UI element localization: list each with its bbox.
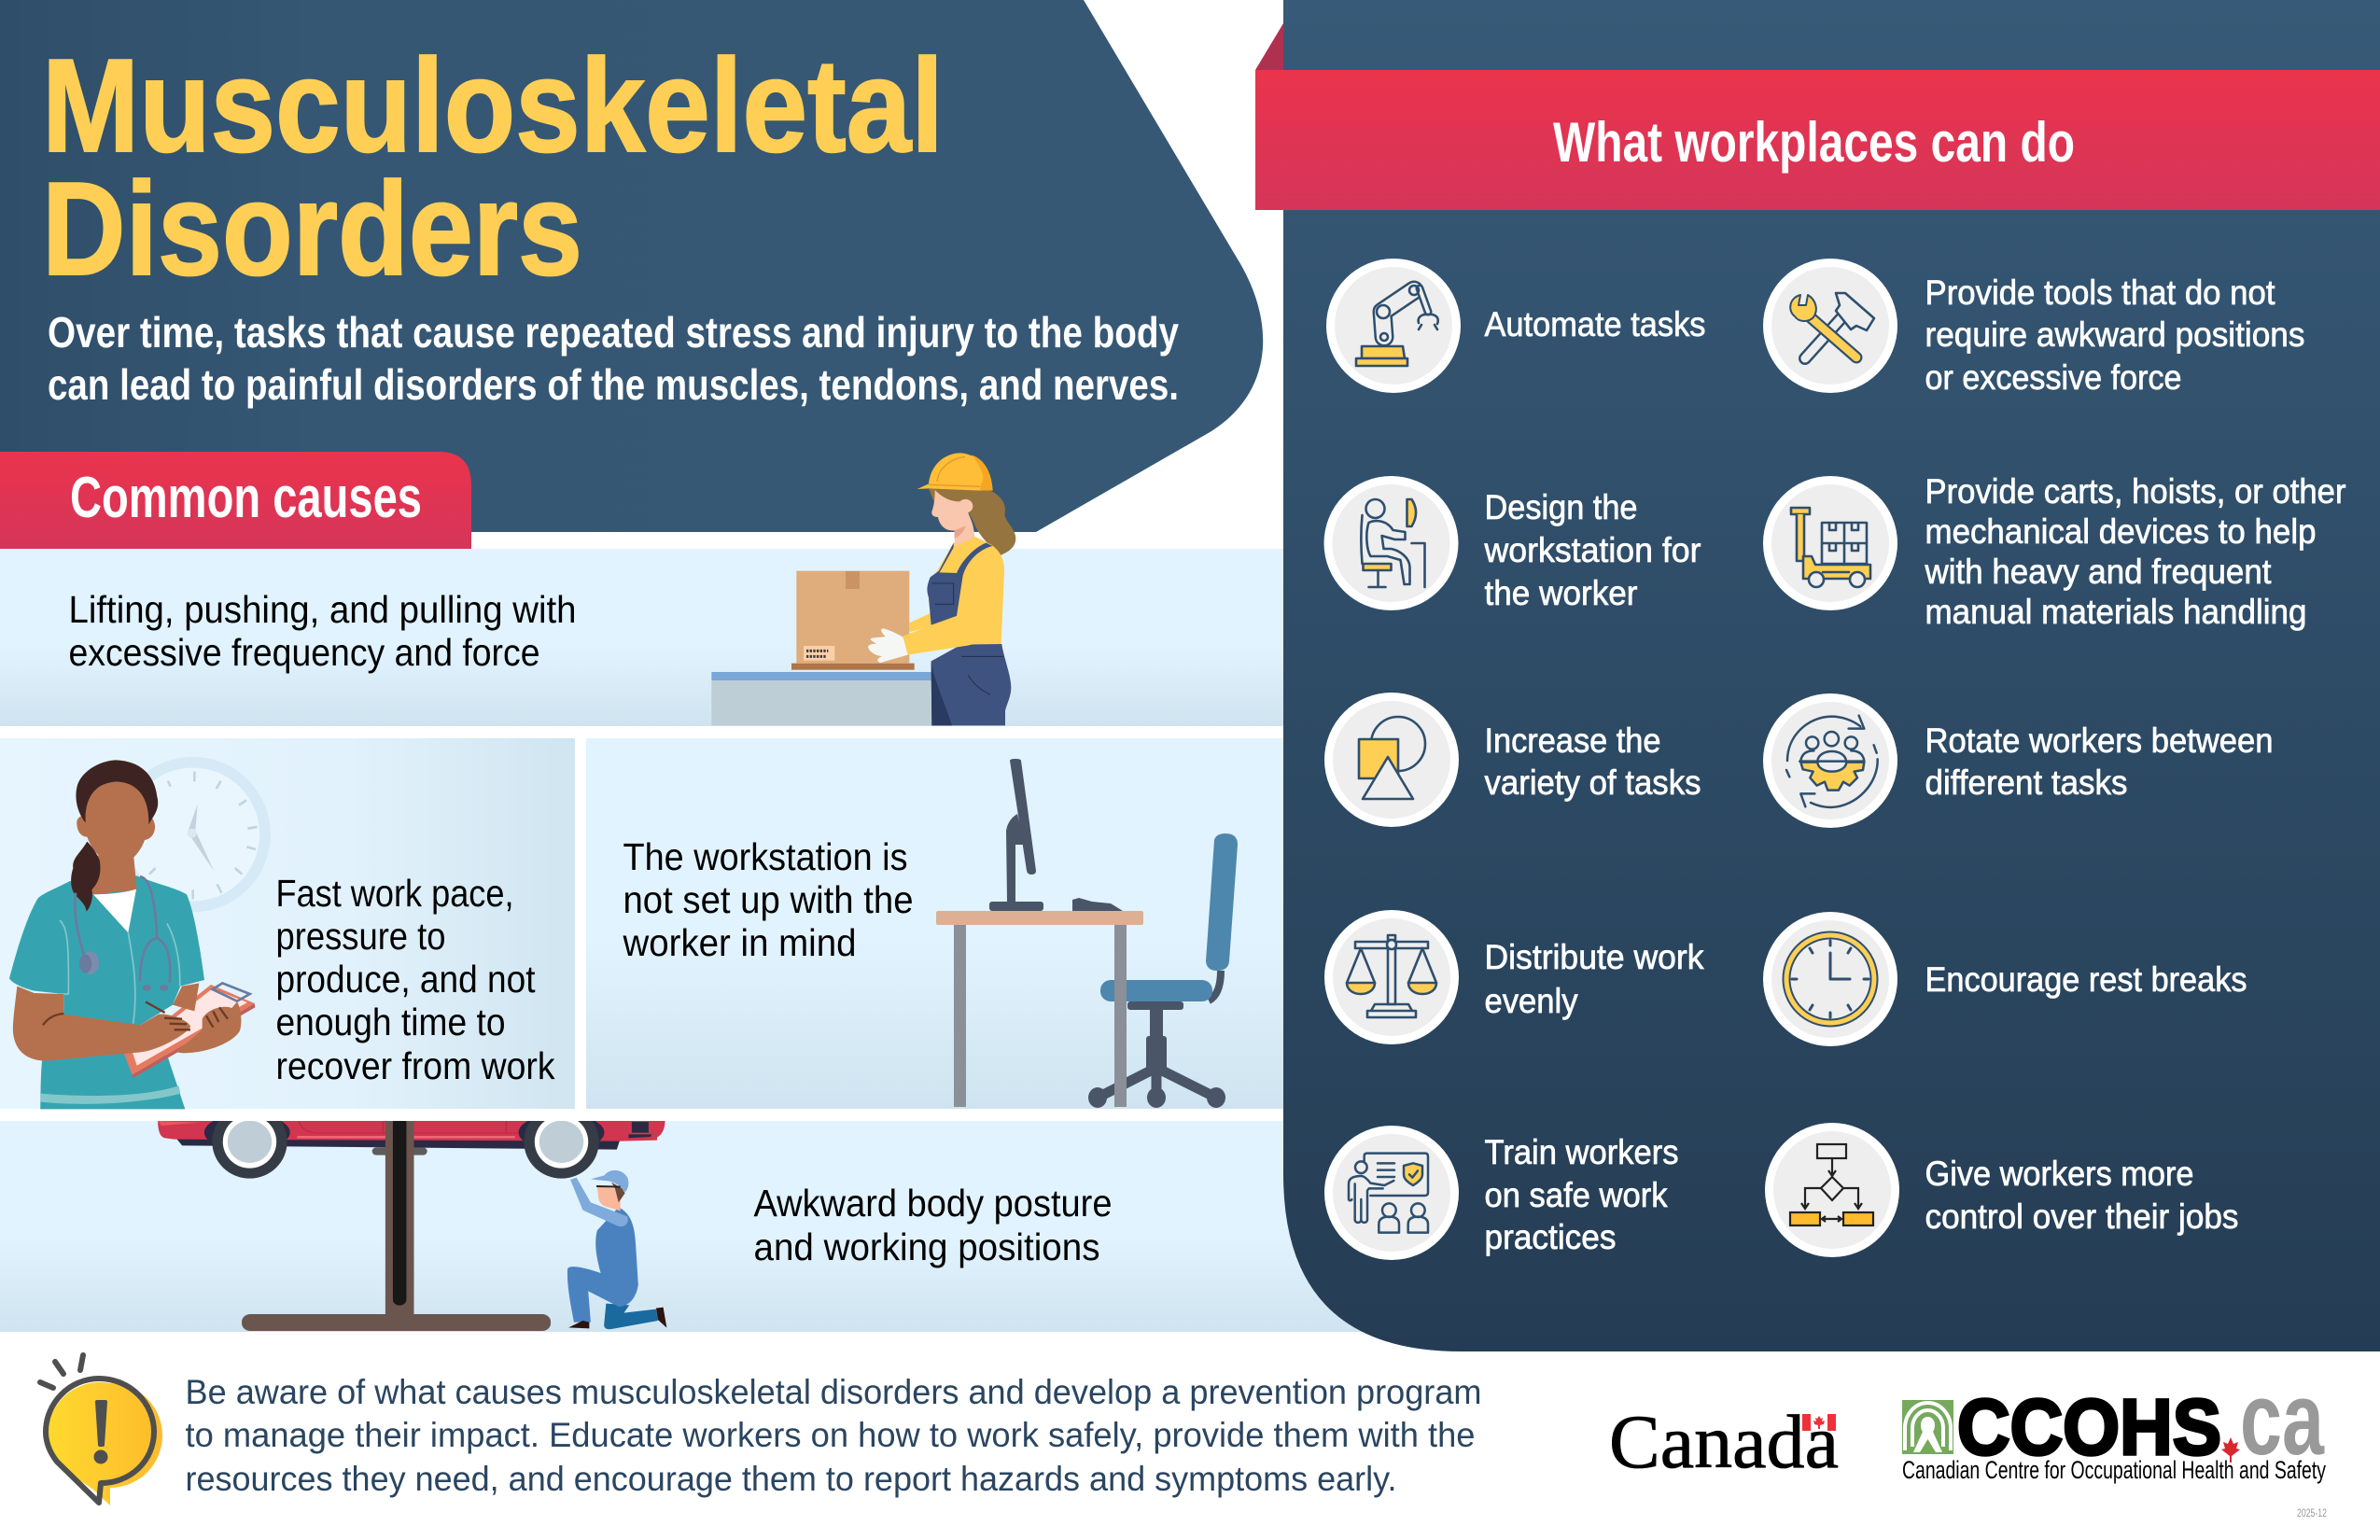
text: distribute work [1484, 938, 1704, 1020]
item: train workers [1324, 1126, 1459, 1260]
panel: lifting cause [0, 549, 1288, 726]
logo: Canada wordmark: Canada [1609, 1399, 1839, 1484]
intro text: can lead to painful disorders of the muscles, tendons, and nerves. [48, 360, 1179, 409]
logo: CCOHS: ca [2240, 1362, 2325, 1477]
panel: fast work pace: Fast work pace, [276, 872, 513, 915]
text: carts and hoists: Provide carts, hoists, or other [1925, 472, 2346, 511]
text block: prevention message: to manage their impact. Educate workers on how to work safely, provide them with the [185, 1416, 1475, 1454]
item: automate tasks [1326, 259, 1461, 393]
panel: fast work pace: recover from work [276, 1044, 555, 1087]
banner: what workplaces can do: What workplaces can do [1553, 111, 2075, 174]
text: rotate workers [1925, 721, 2274, 802]
text: control over jobs: Give workers more [1925, 1155, 2193, 1193]
panel: workstation: not set up with the [623, 878, 913, 921]
panel: fast work pace: enough time to [276, 1001, 506, 1043]
text: rest breaks: Encourage rest breaks [1925, 960, 2247, 999]
text: design workstation: the worker [1484, 574, 1637, 612]
item: carts and hoists [1763, 476, 1897, 610]
item: control over jobs [1765, 1123, 1899, 1257]
item: rotate workers [1763, 693, 1897, 828]
illustration: worker lifting box [711, 453, 1015, 725]
header panel background [0, 0, 1263, 532]
heading: common causes: Common causes [70, 466, 422, 530]
panel: awkward posture [0, 1121, 1400, 1332]
text: rotate workers: different tasks [1925, 763, 2128, 802]
text: provide tools [1925, 273, 2305, 397]
date code: 2025-12 [2297, 1506, 2327, 1519]
text block: prevention message: Be aware of what causes musculoskeletal disorders and develop a prevention program [185, 1373, 1482, 1411]
text: train workers: on safe work [1484, 1176, 1668, 1214]
text: provide tools: require awkward positions [1925, 315, 2305, 354]
title: Musculoskeletal [42, 32, 944, 180]
banner: what workplaces can do [1255, 23, 2380, 210]
text: distribute work: evenly [1484, 982, 1578, 1020]
heading: common causes [0, 452, 471, 549]
text: variety of tasks: variety of tasks [1484, 763, 1701, 802]
item: design workstation [1323, 476, 1458, 610]
text: variety of tasks: Increase the [1484, 721, 1661, 760]
text block: prevention message [185, 1373, 1482, 1498]
item: rest breaks [1763, 912, 1897, 1046]
item: provide tools [1763, 259, 1897, 393]
panel: fast work pace [0, 738, 575, 1109]
panel: workstation: worker in mind [623, 921, 857, 964]
text: design workstation: Design the [1484, 488, 1637, 526]
text: carts and hoists: with heavy and frequent [1925, 553, 2272, 591]
panel: lifting cause: excessive frequency and force [69, 631, 539, 674]
panel: awkward posture: Awkward body posture [754, 1182, 1113, 1225]
panel: fast work pace: produce, and not [276, 958, 536, 1001]
panel: workstation [586, 738, 1288, 1109]
panel: lifting cause: Lifting, pushing, and pulling with [69, 588, 577, 631]
text: control over jobs: control over their jobs [1925, 1197, 2238, 1236]
text: carts and hoists [1925, 472, 2346, 631]
illustration: car on lift with mechanic [158, 1105, 666, 1331]
item: variety of tasks [1324, 693, 1459, 827]
title [42, 32, 944, 303]
text: automate tasks: Automate tasks [1484, 305, 1706, 343]
illustration: desk and chair [936, 759, 1238, 1108]
text: rotate workers: Rotate workers between [1925, 721, 2274, 760]
panel: awkward posture: and working positions [754, 1225, 1099, 1268]
text: carts and hoists: manual materials handling [1925, 593, 2307, 631]
text: distribute work: Distribute work [1484, 938, 1704, 976]
intro text [48, 308, 1179, 409]
logo: CCOHS [1902, 1362, 2326, 1484]
item: distribute work [1324, 910, 1459, 1044]
title: Disorders [42, 155, 582, 303]
text block: prevention message: resources they need, and encourage them to report hazards and symptoms early. [185, 1460, 1396, 1498]
panel: what workplaces can do [1283, 0, 2380, 1351]
text: variety of tasks [1484, 721, 1701, 802]
icon: alert speech bubble [40, 1355, 162, 1505]
text: carts and hoists: mechanical devices to help [1925, 512, 2317, 551]
text: provide tools: or excessive force [1925, 358, 2182, 397]
text: train workers: Train workers [1484, 1133, 1678, 1171]
text: design workstation [1484, 488, 1701, 612]
text: train workers [1484, 1133, 1678, 1256]
intro text: Over time, tasks that cause repeated stress and injury to the body [48, 308, 1179, 357]
panel: workstation: The workstation is [623, 835, 907, 878]
text: provide tools: Provide tools that do not [1925, 273, 2275, 312]
text: design workstation: workstation for [1484, 531, 1701, 569]
panel: fast work pace: pressure to [276, 915, 446, 958]
logo: CCOHS: CCOHS [1957, 1383, 2221, 1471]
illustration: nurse with clock [9, 760, 265, 1109]
text: train workers: practices [1484, 1218, 1617, 1256]
text: control over jobs [1925, 1155, 2238, 1236]
